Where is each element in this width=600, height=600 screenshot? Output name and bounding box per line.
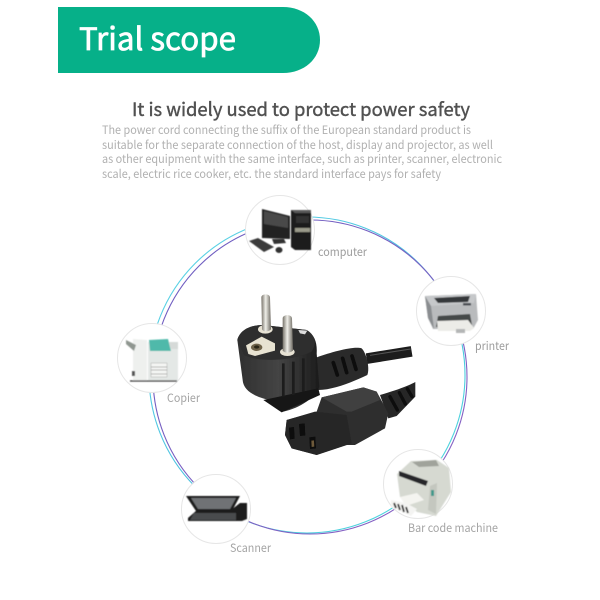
plug body xyxy=(237,325,319,412)
product photo: power cord plug and connector xyxy=(237,294,415,455)
description text block xyxy=(102,122,502,182)
icon: bar code printer xyxy=(391,460,451,516)
node: copier xyxy=(118,324,200,406)
cord from plug xyxy=(367,351,412,359)
bar code label xyxy=(391,500,417,516)
subtitle heading: It is widely used to protect power safety xyxy=(132,96,470,122)
icon: flatbed scanner xyxy=(186,496,247,521)
label: printer: printer xyxy=(475,338,509,354)
description text block: scale, electric rice cooker, etc. the standard interface pays for safety xyxy=(102,166,441,182)
banner title text: Trial scope xyxy=(79,14,236,59)
connector cord xyxy=(380,382,415,418)
description text block: as other equipment with the same interface, such as printer, scanner, electronic xyxy=(102,151,502,167)
title banner xyxy=(58,7,320,73)
label: bar code machine: Bar code machine xyxy=(408,520,498,536)
description text block: The power cord connecting the suffix of the European standard product is xyxy=(102,122,471,138)
plug strain relief xyxy=(317,348,368,390)
icon: desktop computer xyxy=(249,209,311,253)
earth contact xyxy=(246,337,275,356)
icon: office copier xyxy=(126,339,178,381)
description text block: suitable for the separate connection of the host, display and projector, as well xyxy=(102,137,493,153)
node: scanner xyxy=(182,474,271,556)
node: printer xyxy=(416,276,509,354)
label: computer: computer xyxy=(318,244,367,260)
label: copier: Copier xyxy=(167,390,200,406)
icon: laser printer xyxy=(425,294,478,333)
connector sockets xyxy=(289,427,295,439)
node: bar code machine xyxy=(384,450,498,536)
ring: cyan and purple arcs xyxy=(149,217,467,534)
node: computer xyxy=(246,196,367,264)
pins xyxy=(258,325,273,334)
label: scanner: Scanner xyxy=(230,540,271,556)
IEC connector xyxy=(285,387,388,455)
